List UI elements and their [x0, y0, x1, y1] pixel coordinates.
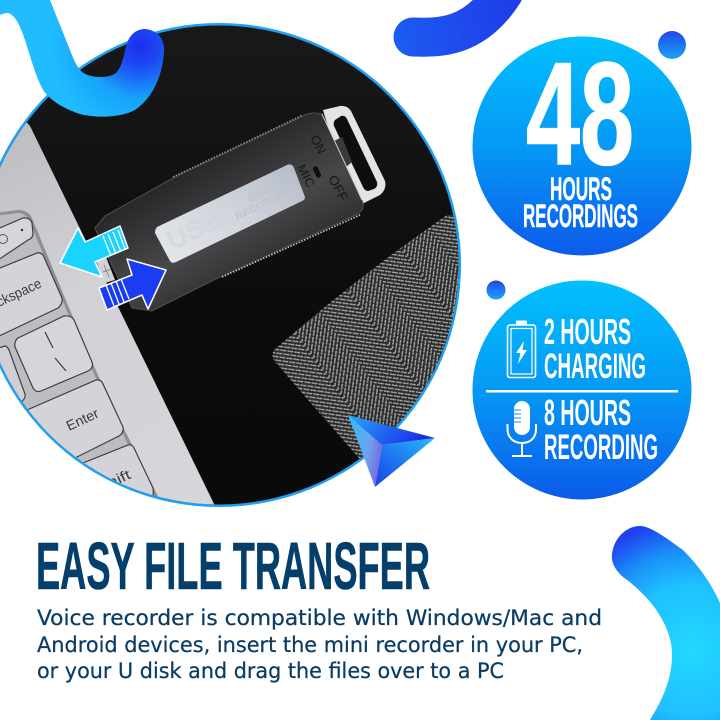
key: power: [0, 218, 33, 262]
port marker: [96, 257, 115, 283]
arrow: out cyan: [60, 226, 128, 277]
screen: [155, 164, 305, 263]
line 2: Android devices, insert the mini recorder in your PC,: [37, 633, 583, 657]
fabric pouch: [272, 215, 458, 459]
key: shift: [83, 444, 154, 496]
photo circle: [0, 20, 480, 520]
laptop body: [0, 122, 214, 504]
metal loop: [323, 106, 385, 205]
divider: [486, 390, 678, 392]
USB recorder: OFF: [325, 173, 351, 203]
serrated edges: [173, 115, 303, 177]
key: left: [0, 346, 25, 410]
indicator slot: [313, 166, 321, 178]
arrowhead triangle: [348, 415, 435, 487]
description: [37, 606, 602, 683]
badge: charging and recording: [472, 280, 692, 500]
USB recorder: USB: [162, 205, 226, 255]
top-left swoosh: [0, 0, 164, 117]
big number: 48: [526, 32, 634, 195]
text: 2 hours: 2 HOURS: [544, 311, 631, 352]
line 3: or your U disk and drag the files over to a PC: [37, 659, 504, 683]
label: hours: HOURS: [550, 171, 612, 207]
arrow: in blue: [99, 259, 166, 310]
USB recorder: MIC: [294, 162, 318, 190]
key: enter: [28, 379, 124, 458]
key: slash: [15, 316, 92, 392]
decorative dot top: [658, 31, 686, 59]
switch: [335, 137, 352, 166]
recorder body: [95, 113, 363, 311]
line 1: Voice recorder is compatible with Windows/Mac and: [37, 606, 602, 630]
USB recorder: ON: [307, 133, 329, 156]
USB recorder: RECORDER: [233, 186, 294, 223]
icon: battery: [508, 320, 536, 378]
icon: microphone: [508, 401, 536, 456]
decorative dot middle: [486, 280, 506, 300]
USB recorder: [95, 106, 385, 311]
text: 8 hours: 8 HOURS: [544, 392, 631, 433]
bottom-right swoosh: [612, 526, 720, 720]
top-right swoosh: [413, 0, 504, 37]
key: enter: Enter: [64, 405, 101, 434]
badge: 48 hours recordings: [472, 32, 692, 256]
key: shift: hift: [105, 466, 133, 491]
key: backspace: [0, 253, 62, 338]
USB recorder: DISK: [246, 184, 273, 204]
